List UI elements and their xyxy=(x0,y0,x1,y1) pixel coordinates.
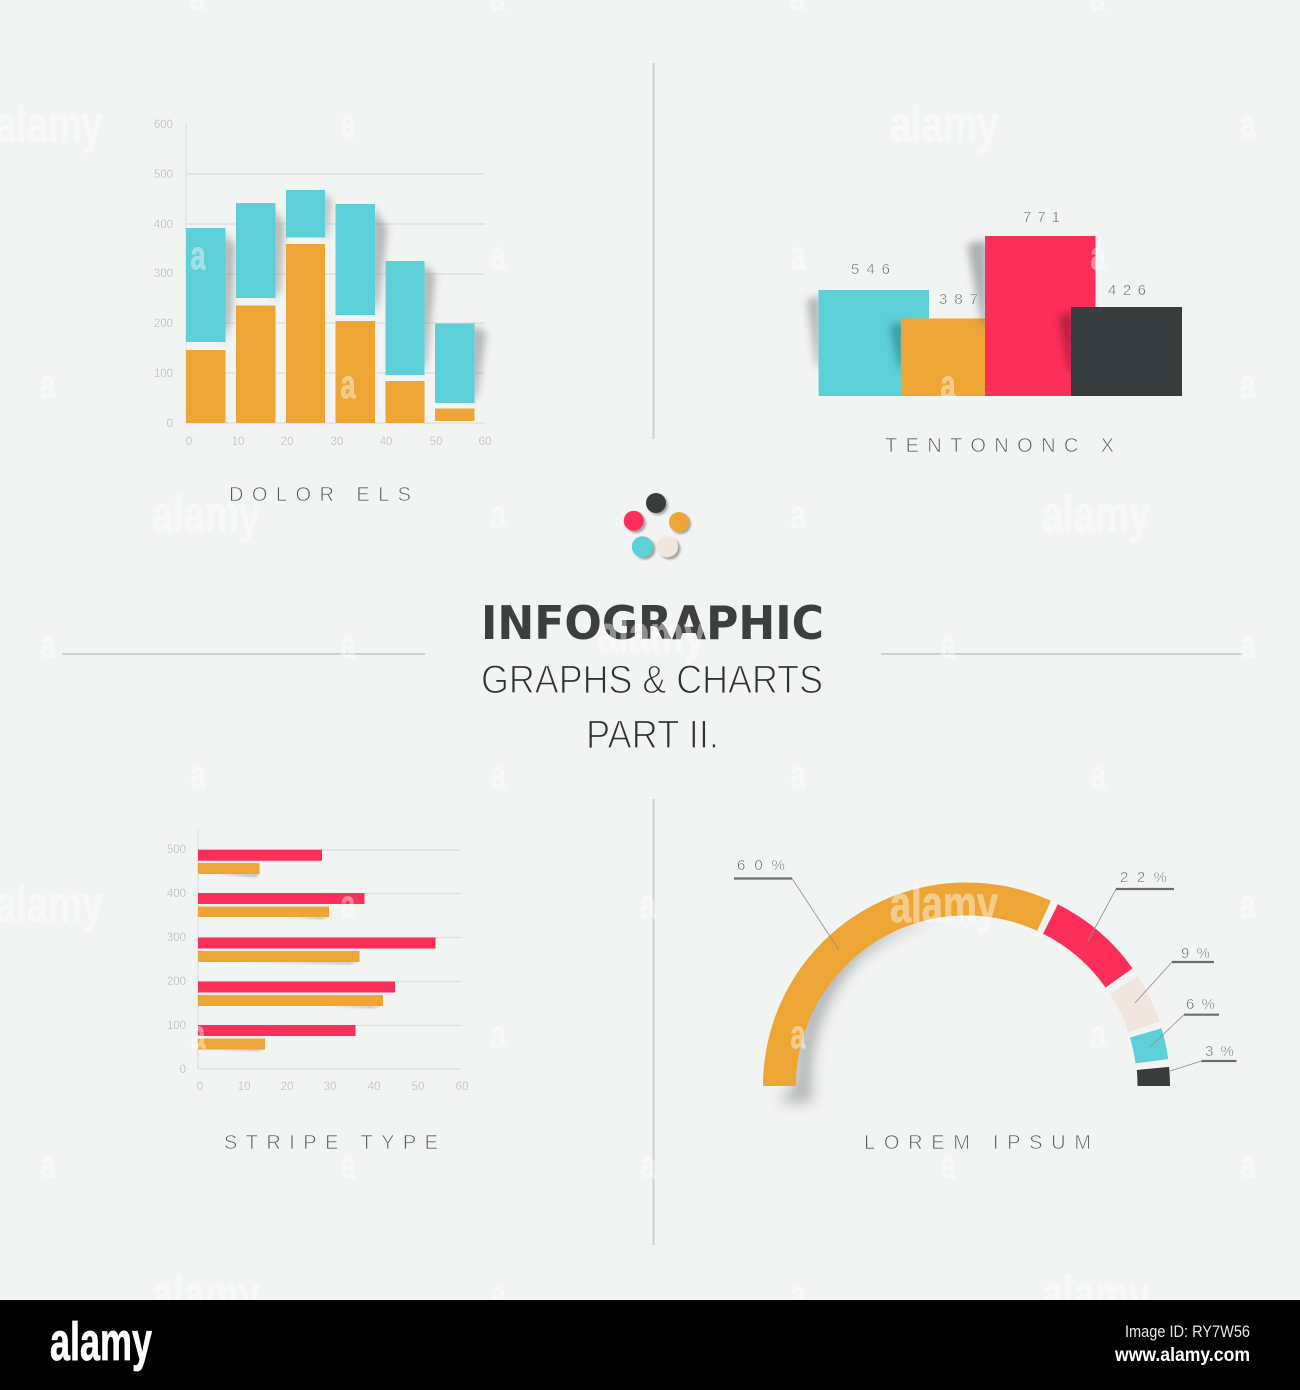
title block: GRAPHS & CHARTS xyxy=(481,658,823,702)
columns: orange lower series xyxy=(186,244,474,423)
callout 9% xyxy=(1135,945,1214,1003)
x axis labels xyxy=(197,1081,468,1093)
watermark pattern: a xyxy=(1240,1143,1256,1187)
watermark pattern: alamy xyxy=(890,876,998,934)
watermark pattern: a xyxy=(1240,883,1256,927)
segment 22% xyxy=(1043,904,1133,988)
x axis labels: 0 xyxy=(186,436,192,448)
chart caption: STRIPE TYPE xyxy=(224,1132,438,1154)
y axis labels: 500 xyxy=(154,169,173,181)
title block: INFOGRAPHIC xyxy=(481,596,824,650)
x axis labels: 50 xyxy=(412,1081,424,1093)
watermark pattern: alamy xyxy=(597,606,705,664)
segment 3% xyxy=(1137,1067,1170,1086)
x axis labels: 20 xyxy=(281,1081,293,1093)
watermark pattern: a xyxy=(490,1013,506,1057)
teal bar shadow xyxy=(807,296,820,366)
y axis labels: 400 xyxy=(167,888,186,900)
y axis labels: 100 xyxy=(167,1020,186,1032)
columns: teal upper series xyxy=(186,190,474,403)
watermark pattern: a xyxy=(1090,753,1106,797)
x axis labels: 30 xyxy=(331,436,343,448)
x axis labels: 20 xyxy=(281,436,293,448)
website: www.alamy.com xyxy=(1114,1345,1250,1366)
watermark pattern: alamy xyxy=(890,96,998,154)
callout 9%: 9% xyxy=(1181,945,1210,962)
red series bars xyxy=(198,850,436,1036)
watermark pattern: a xyxy=(340,102,356,146)
x axis labels: 40 xyxy=(380,436,392,448)
callout 3% xyxy=(1170,1043,1236,1071)
orange bar shadow xyxy=(890,322,903,368)
watermark pattern: a xyxy=(640,883,656,927)
panel: horizontal bars Stripe Type xyxy=(167,830,468,1154)
watermark pattern: a xyxy=(490,234,506,278)
watermark pattern: a xyxy=(340,623,356,667)
footer logo: alamy xyxy=(50,1312,152,1372)
watermark pattern: a xyxy=(1240,363,1256,407)
watermark pattern: a xyxy=(190,753,206,797)
y axis labels: 200 xyxy=(167,976,186,988)
segment 60% xyxy=(763,882,1051,1086)
value labels xyxy=(851,209,1146,308)
x axis labels: 10 xyxy=(232,436,244,448)
bar shadows xyxy=(210,874,382,1051)
watermark pattern: a xyxy=(790,753,806,797)
y axis labels xyxy=(154,119,173,430)
watermark pattern: a xyxy=(790,234,806,278)
x axis labels: 50 xyxy=(430,436,442,448)
callout 22% xyxy=(1088,869,1174,941)
red bar shadow xyxy=(967,240,987,325)
watermark pattern: a xyxy=(1090,234,1106,278)
y axis labels: 500 xyxy=(167,844,186,856)
watermark pattern: a xyxy=(40,623,56,667)
bar 426 xyxy=(1071,307,1182,396)
watermark pattern: a xyxy=(1240,623,1256,667)
segment 6% xyxy=(1130,1028,1168,1063)
x axis labels: 30 xyxy=(324,1081,336,1093)
segment 9% xyxy=(1110,976,1160,1032)
y axis labels xyxy=(167,844,186,1076)
x axis labels: 0 xyxy=(197,1081,203,1093)
chart caption: TENTONONC X xyxy=(885,435,1114,457)
watermark pattern: a xyxy=(490,753,506,797)
value labels: 546 xyxy=(851,261,890,278)
watermark pattern: a xyxy=(40,1143,56,1187)
gauge shadow xyxy=(778,917,945,1102)
bar 771 xyxy=(985,236,1096,396)
watermark pattern: a xyxy=(790,493,806,537)
watermark pattern: a xyxy=(1240,102,1256,146)
watermark pattern: a xyxy=(940,623,956,667)
panel: stacked column chart Dolor Els xyxy=(154,119,491,506)
watermark pattern: alamy xyxy=(152,486,260,544)
callout 22%: 22% xyxy=(1120,869,1167,886)
watermark pattern: a xyxy=(190,1013,206,1057)
callout 6% xyxy=(1150,996,1219,1047)
watermark pattern: a xyxy=(40,363,56,407)
callout 3%: 3% xyxy=(1205,1043,1234,1060)
orange series bars xyxy=(198,863,383,1050)
image id: Image ID: RY7W56 xyxy=(1125,1322,1250,1341)
watermark pattern: a xyxy=(1090,1013,1106,1057)
x axis labels: 10 xyxy=(238,1081,250,1093)
panel: overlapping bars Tentononc X xyxy=(807,209,1182,457)
y axis labels: 0 xyxy=(167,418,173,430)
y axis labels: 100 xyxy=(154,368,173,380)
x axis labels: 40 xyxy=(368,1081,380,1093)
watermark pattern: a xyxy=(940,363,956,407)
watermark pattern: a xyxy=(490,493,506,537)
watermark pattern: a xyxy=(340,883,356,927)
value labels: 771 xyxy=(1023,209,1060,226)
watermark pattern: a xyxy=(640,1143,656,1187)
chart caption: DOLOR ELS xyxy=(229,484,411,506)
watermark pattern: alamy xyxy=(1042,1266,1150,1324)
watermark pattern: alamy xyxy=(1042,486,1150,544)
watermark pattern: alamy xyxy=(152,1266,260,1324)
callout 60% xyxy=(734,857,839,950)
watermark pattern: a xyxy=(190,234,206,278)
column shadows xyxy=(222,192,486,403)
title block: PART II. xyxy=(586,713,719,757)
watermark pattern: a xyxy=(790,1273,806,1317)
y axis labels: 600 xyxy=(154,119,173,131)
chart caption: LOREM IPSUM xyxy=(864,1132,1091,1154)
y axis labels: 0 xyxy=(180,1064,186,1076)
panel: semicircle gauge Lorem Ipsum xyxy=(734,857,1236,1154)
y axis labels: 200 xyxy=(154,318,173,330)
footer bar xyxy=(0,1300,1300,1390)
y axis labels: 300 xyxy=(167,932,186,944)
x axis labels: 60 xyxy=(456,1081,468,1093)
bar 546 xyxy=(818,290,929,396)
x axis labels xyxy=(186,436,491,448)
dark bar shadow xyxy=(1059,312,1073,372)
bar 387 xyxy=(901,318,985,396)
watermark pattern: a xyxy=(340,1143,356,1187)
callout 60%: 60% xyxy=(737,857,785,874)
watermark pattern: a xyxy=(940,1143,956,1187)
watermark pattern: a xyxy=(790,1013,806,1057)
value labels: 387 xyxy=(939,291,978,308)
value labels: 426 xyxy=(1108,282,1146,299)
y axis labels: 300 xyxy=(154,268,173,280)
x axis labels: 60 xyxy=(479,436,491,448)
title block xyxy=(481,596,824,757)
icon: five coloured dots xyxy=(624,493,691,560)
callout 6%: 6% xyxy=(1186,996,1215,1013)
watermark pattern: a xyxy=(490,1273,506,1317)
watermark pattern: a xyxy=(340,363,356,407)
y axis labels: 400 xyxy=(154,219,173,231)
